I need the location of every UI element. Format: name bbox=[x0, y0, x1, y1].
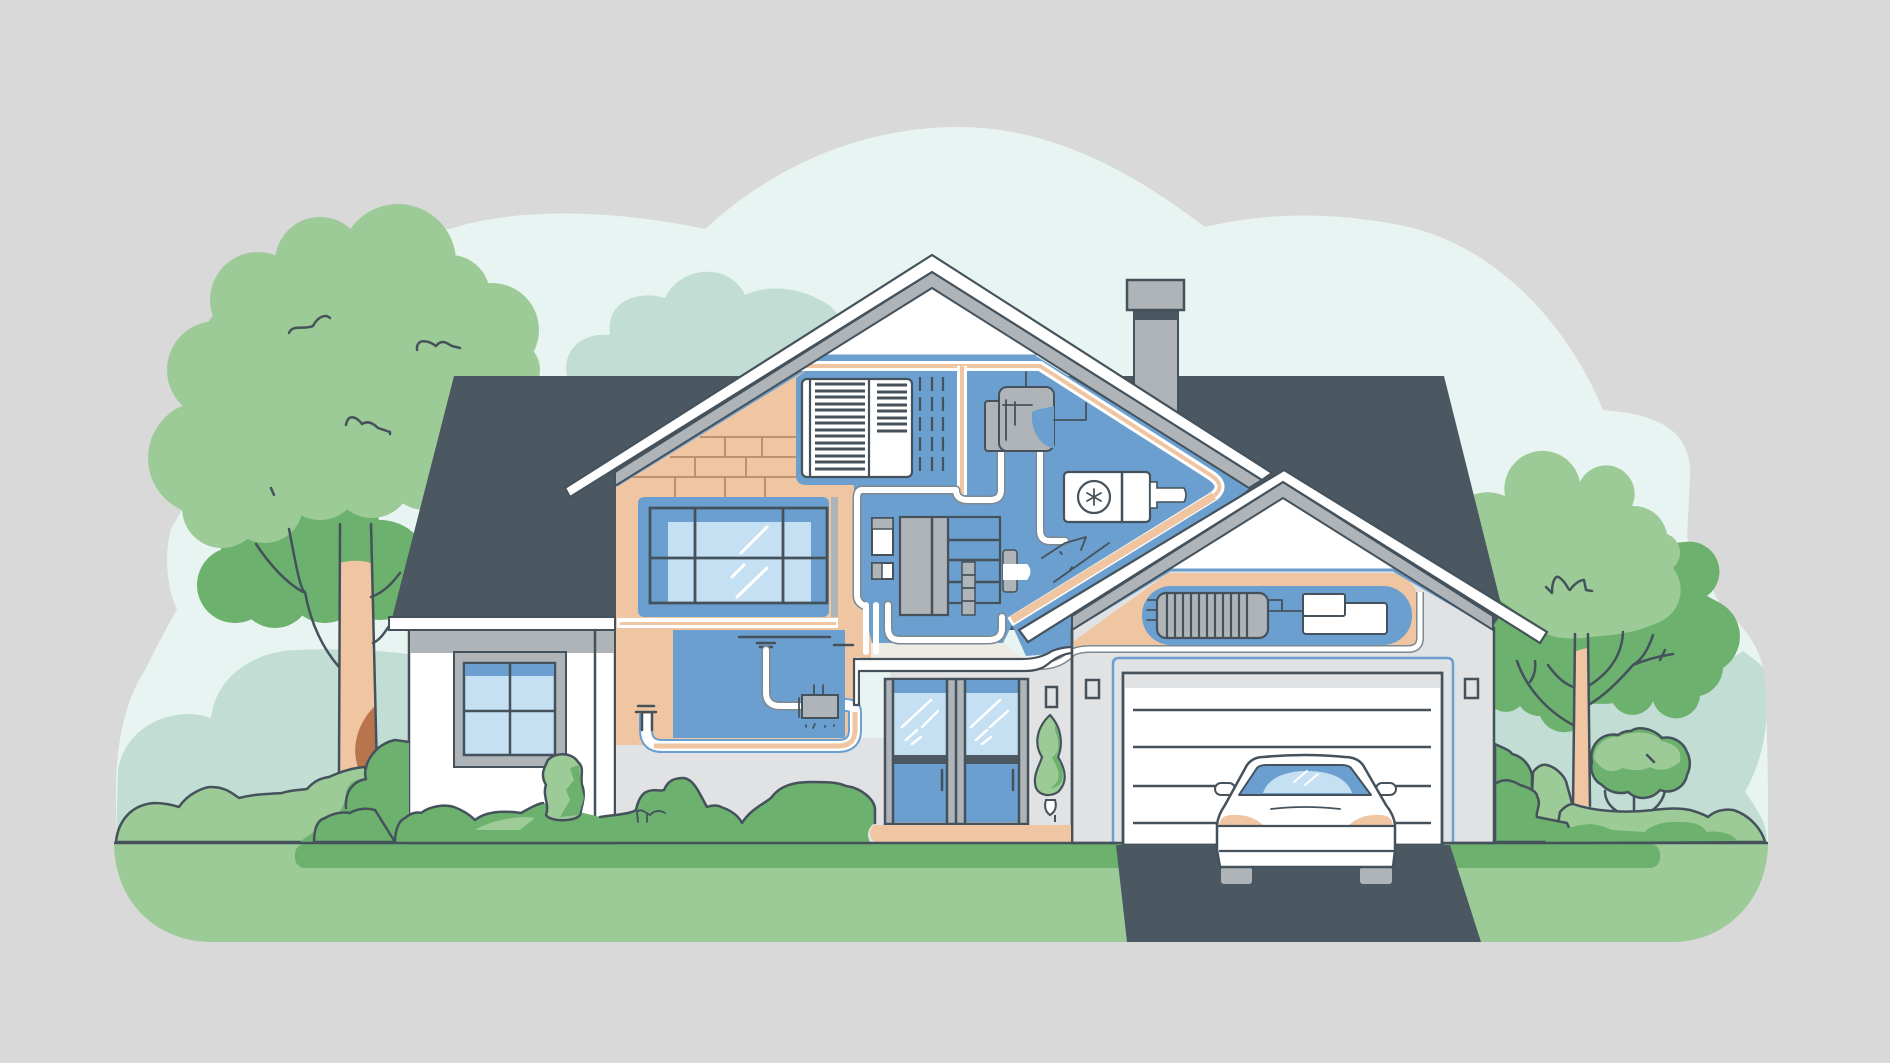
light patch bbox=[475, 817, 535, 830]
tree: right bbox=[1470, 451, 1740, 806]
radiator fins bbox=[1167, 593, 1247, 638]
fitting bbox=[757, 643, 775, 647]
downpipe line bbox=[594, 630, 596, 825]
background hill: left bbox=[116, 649, 415, 843]
frame lines bbox=[893, 679, 1019, 824]
vent dashes bbox=[920, 377, 943, 473]
foliage shade bbox=[1050, 725, 1063, 788]
garage divider wall line bbox=[1071, 628, 1073, 843]
louvres bbox=[815, 384, 907, 469]
driveway bbox=[1116, 845, 1481, 942]
cap bbox=[1127, 280, 1184, 310]
gray strip beside window bbox=[831, 497, 838, 617]
lower loop pipe bbox=[636, 705, 855, 746]
frame bbox=[885, 679, 1028, 824]
small column bbox=[962, 562, 975, 615]
divider bbox=[1121, 472, 1123, 522]
AC unit bbox=[802, 379, 912, 477]
background hill: right bbox=[1490, 651, 1767, 843]
sky backdrop bbox=[116, 127, 1768, 843]
connector bbox=[1150, 482, 1186, 508]
trunk outline and branches bbox=[256, 524, 400, 772]
canopy light bbox=[1594, 733, 1680, 771]
dark foliage bbox=[1480, 542, 1740, 732]
hedge front of left wing bbox=[395, 778, 875, 842]
pipe to unit bbox=[766, 650, 800, 706]
shadow bbox=[1134, 310, 1178, 320]
side boxes bbox=[872, 518, 893, 555]
hip roof bbox=[389, 376, 1503, 630]
vertical duct bbox=[957, 366, 967, 495]
chimney bbox=[1127, 280, 1184, 420]
window panel: upper large bbox=[638, 497, 829, 617]
main duct: top and right bbox=[800, 366, 1220, 622]
left top blue bbox=[893, 680, 947, 693]
fan unit bbox=[1064, 472, 1186, 522]
small wall windows bbox=[1046, 679, 1478, 707]
tires bbox=[1221, 867, 1252, 884]
garage peach band bbox=[1074, 573, 1418, 648]
frame bbox=[650, 508, 827, 603]
door assembly bbox=[885, 679, 1028, 824]
hedge body bbox=[395, 778, 875, 842]
light behind bbox=[1530, 765, 1572, 842]
garage blue lines bbox=[1074, 570, 1493, 628]
body bbox=[1217, 755, 1395, 867]
lower room bbox=[673, 630, 853, 738]
handles bbox=[942, 770, 1013, 790]
left lower panel bbox=[893, 764, 947, 822]
prongs and ticks bbox=[799, 685, 834, 728]
window mullions bbox=[464, 663, 555, 755]
right glass bbox=[965, 693, 1019, 755]
background hill: behind house bbox=[566, 272, 900, 376]
pot bbox=[1045, 800, 1056, 822]
compressor: top bbox=[985, 372, 1086, 451]
ground line bbox=[114, 842, 1768, 844]
low dark hedge bbox=[1545, 822, 1737, 842]
ground dark grass strip bbox=[295, 844, 1660, 868]
foliage bbox=[1035, 715, 1065, 795]
bricks bbox=[631, 437, 796, 497]
door lines bbox=[1133, 710, 1431, 823]
wall bbox=[409, 628, 615, 843]
light foliage bbox=[148, 204, 540, 548]
hedge leaf marks bbox=[637, 810, 665, 822]
mirrors bbox=[1215, 783, 1235, 795]
low light hedge bbox=[1555, 804, 1765, 842]
stem and branches bbox=[1605, 791, 1665, 830]
gray band bbox=[410, 630, 614, 653]
left wing bbox=[389, 617, 615, 843]
left fitting bbox=[636, 706, 656, 730]
plug bbox=[1003, 550, 1017, 592]
fan circle bbox=[1078, 481, 1110, 513]
hood line bbox=[1271, 807, 1340, 809]
radiator bbox=[1157, 593, 1268, 638]
main gable: gray fascia bbox=[615, 272, 1262, 488]
garage capsule bbox=[1142, 586, 1412, 645]
glare bbox=[902, 700, 1008, 744]
birds bbox=[271, 316, 460, 495]
trunk bbox=[339, 561, 377, 772]
hedge outline bbox=[395, 778, 875, 842]
right lower panel bbox=[965, 764, 1019, 822]
windshield bbox=[1239, 765, 1371, 795]
garage wall bbox=[1072, 498, 1494, 843]
trunk outline and branches bbox=[1517, 632, 1673, 806]
main house: peach brick wall bbox=[616, 356, 880, 745]
leaf tick bbox=[1647, 755, 1654, 762]
garage door surround bbox=[1113, 658, 1453, 843]
windshield glare bbox=[1294, 771, 1318, 785]
garage gable: white fascia bbox=[1019, 470, 1547, 643]
right hedges bbox=[1495, 744, 1765, 842]
garage white pipe bbox=[1040, 592, 1420, 666]
trunk knot bbox=[355, 706, 376, 767]
window frame bbox=[454, 652, 566, 767]
fan blades bbox=[1087, 489, 1101, 505]
attic blue line along roof bbox=[617, 356, 1036, 485]
dark foliage bbox=[197, 480, 430, 628]
eave bbox=[389, 617, 615, 630]
light foliage bbox=[1470, 451, 1681, 638]
bird bbox=[1546, 577, 1592, 593]
central air handler bbox=[872, 517, 1030, 615]
box lower bbox=[1303, 603, 1387, 634]
dividers bbox=[810, 379, 869, 477]
dark patches bbox=[560, 765, 584, 817]
garage gable: gray fascia bbox=[1072, 482, 1493, 630]
main house: attic white triangle bbox=[820, 284, 1042, 358]
gray core bbox=[900, 517, 948, 615]
porch step bbox=[870, 825, 1071, 842]
car bbox=[1215, 755, 1396, 884]
glare bbox=[732, 527, 767, 597]
doodle lines near duct bbox=[1042, 537, 1109, 582]
headlights bbox=[1219, 815, 1393, 826]
door shade bbox=[1125, 675, 1440, 688]
main house wall: lower gray bbox=[616, 660, 1072, 843]
radiator stubs and wire bbox=[1147, 600, 1303, 620]
right top blue bbox=[965, 680, 1019, 693]
garage door bbox=[1123, 673, 1442, 845]
hedge left: dark bbox=[300, 740, 409, 842]
blue cutout bbox=[1032, 406, 1054, 448]
small shrub tree: right bbox=[1591, 728, 1690, 830]
dark rails bbox=[893, 755, 1019, 764]
main interior blue cutaway bbox=[796, 356, 1250, 656]
floor band bbox=[617, 618, 838, 628]
dark back bush bbox=[1495, 744, 1532, 800]
porch beam bbox=[854, 647, 1072, 705]
lines bbox=[1003, 372, 1086, 440]
front bush bbox=[314, 809, 395, 842]
beige utility area bbox=[871, 643, 1024, 658]
water unit bbox=[802, 695, 838, 718]
right rows bbox=[948, 517, 1000, 603]
garage attic white triangle bbox=[1170, 498, 1396, 570]
window glass bbox=[464, 663, 555, 755]
glass bbox=[668, 522, 811, 602]
topiary bbox=[1035, 715, 1065, 822]
pipes: upper bbox=[857, 453, 1065, 700]
tree: left bbox=[148, 204, 540, 772]
ground lawn bbox=[114, 843, 1768, 942]
main gable: white fascia bbox=[565, 255, 1272, 497]
ceiling line bbox=[739, 637, 853, 645]
dark front bush bbox=[1495, 780, 1575, 842]
stem bbox=[1134, 310, 1178, 420]
left glass bbox=[893, 693, 947, 755]
trunk bbox=[1574, 648, 1590, 806]
hedge left: light bbox=[116, 767, 420, 842]
hedge outlines bbox=[346, 740, 409, 808]
windshield light bbox=[1263, 771, 1352, 793]
window blue top bbox=[465, 664, 554, 676]
window bush bbox=[543, 754, 584, 820]
diagonal lower duct bbox=[1012, 496, 1214, 620]
body lines bbox=[1217, 826, 1395, 851]
canopy dark bbox=[1591, 728, 1690, 798]
box upper bbox=[1303, 594, 1345, 616]
